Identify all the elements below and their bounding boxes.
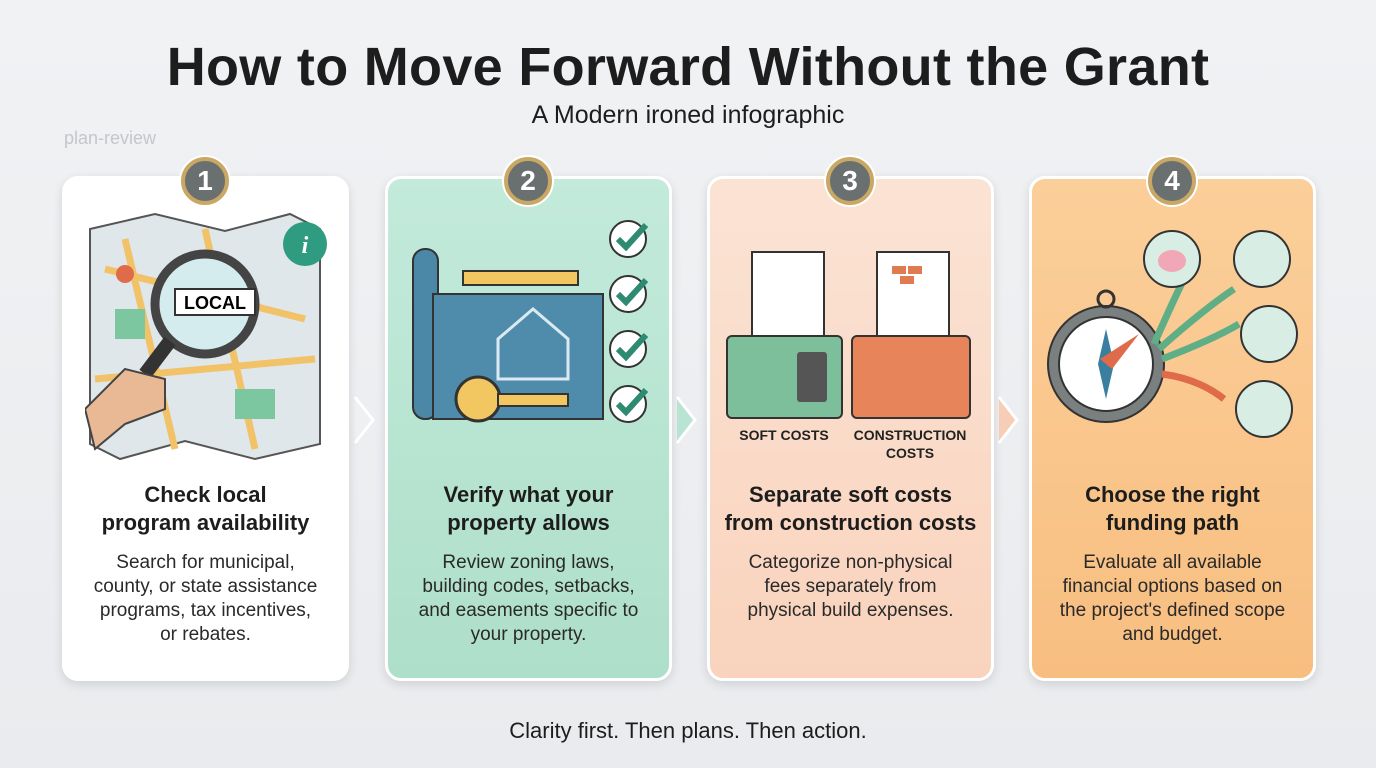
icon: two folders: CONSTRUCTION <box>854 427 966 443</box>
icon: map with magnifier: i <box>302 233 309 259</box>
panel: step 2 <box>385 176 672 681</box>
heading: funding path <box>1106 510 1239 535</box>
badge 2 <box>504 157 552 205</box>
badge 2: 2 <box>520 165 536 196</box>
title: How to Move Forward Without the Grant <box>167 37 1209 97</box>
panel: step 1 <box>62 176 349 681</box>
icon: map with magnifier <box>85 212 327 460</box>
heading: property allows <box>447 510 610 535</box>
subtitle: A Modern ironed infographic <box>532 101 844 129</box>
icon: two folders <box>726 251 971 459</box>
arrow 2 <box>676 396 696 444</box>
panel: step 4 <box>1029 176 1316 681</box>
badge 4 <box>1148 157 1196 205</box>
badge 1 <box>181 157 229 205</box>
icon: two folders: SOFT COSTS <box>739 427 829 443</box>
heading: Choose the right <box>1085 482 1260 507</box>
description: Categorize non-physical fees separately from physical build expenses. <box>748 552 953 621</box>
panel: step 3 <box>707 176 994 681</box>
heading <box>725 482 976 535</box>
watermark label: plan-review <box>64 128 156 148</box>
description: Review zoning laws, building codes, setbacks, and easements specific to your property. <box>419 552 638 645</box>
badge 3 <box>826 157 874 205</box>
arrow 3 <box>998 396 1018 444</box>
heading: Check local <box>144 482 267 507</box>
heading <box>1085 482 1260 535</box>
icon: blueprint with checklist <box>412 220 648 423</box>
badge 1: 1 <box>197 165 213 196</box>
footer tagline: Clarity first. Then plans. Then action. <box>509 718 867 743</box>
heading <box>102 482 310 535</box>
description: Search for municipal, county, or state assistance programs, tax incentives, or rebates. <box>94 552 317 645</box>
heading: Separate soft costs <box>749 482 952 507</box>
heading: Verify what your <box>444 482 613 507</box>
heading: program availability <box>102 510 309 535</box>
arrow 1 <box>354 396 374 444</box>
heading <box>444 482 614 535</box>
description: Evaluate all available financial options based on the project's defined scope and budget. <box>1060 552 1285 645</box>
heading: from construction costs <box>725 510 976 535</box>
badge 4: 4 <box>1164 165 1180 196</box>
icon: map with magnifier: LOCAL <box>184 293 246 313</box>
badge 3: 3 <box>842 165 858 196</box>
icon: compass with paths <box>1047 230 1298 438</box>
